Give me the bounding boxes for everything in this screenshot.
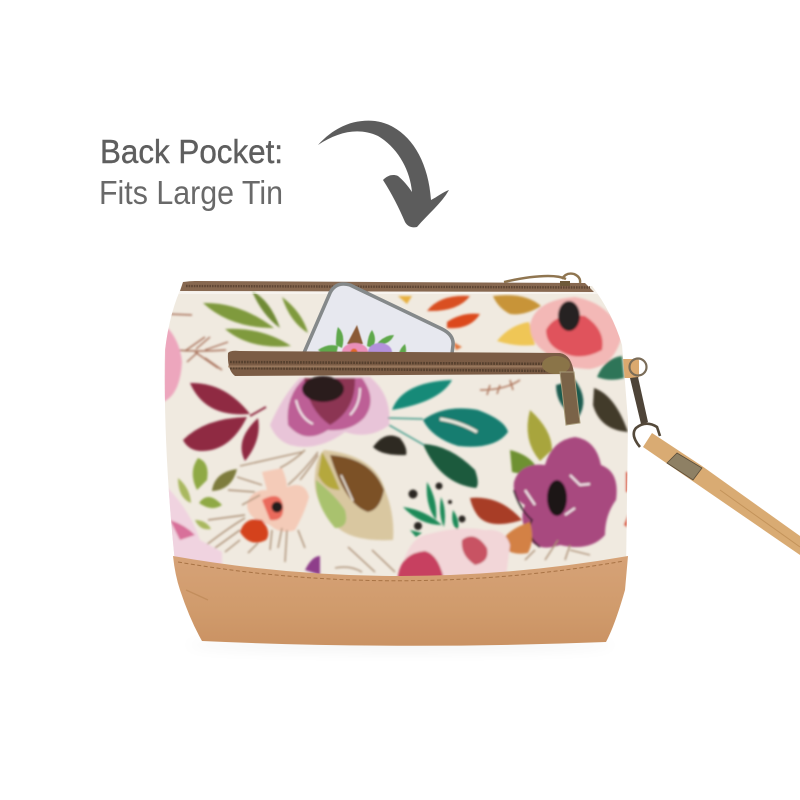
maroon leaves (183, 383, 266, 461)
fabric body (165, 284, 628, 582)
front pocket zipper (228, 351, 580, 425)
magenta flower (514, 437, 617, 548)
heading: Back Pocket: Back Pocket: (100, 133, 283, 170)
tan leather base (173, 556, 628, 646)
base stitching (178, 561, 624, 581)
tin lid (300, 284, 453, 362)
top-left olive leaves (203, 291, 308, 347)
photo: floral pouch with wristlet strap (163, 274, 800, 651)
swivel clasp (630, 377, 648, 424)
olive and green leaves right (510, 410, 552, 473)
strap tab and ring (622, 358, 646, 378)
left pink flower top (163, 325, 182, 402)
top zipper pull (504, 274, 580, 286)
metal strap band (667, 453, 702, 480)
bottom pink flower (398, 528, 510, 585)
bottom-left pale flower (168, 489, 222, 564)
red-brown and orange leaves (470, 498, 522, 524)
tin floral artwork (318, 325, 406, 362)
red poppy top right (530, 297, 622, 369)
arrow: curved arrow pointing down into the pocket (318, 121, 449, 227)
strap body (643, 433, 800, 555)
sprig branch under pocket (480, 380, 520, 395)
right side dark leaves (556, 356, 628, 432)
fine stems (200, 450, 590, 572)
upper lining highlight below the zipper (170, 291, 610, 294)
wristlet strap (622, 358, 800, 555)
bag ground shadow (185, 639, 615, 651)
text: Fits Large Tin: Fits Large Tin (99, 174, 283, 211)
salmon flower (240, 468, 309, 543)
small green leaves left (178, 458, 237, 529)
teal leaves (373, 380, 508, 488)
label: Back Pocket text (99, 133, 283, 211)
floral print (163, 291, 634, 585)
tin peeking out of the back pocket (300, 284, 453, 362)
top zipper (180, 274, 594, 292)
left branch sprig (168, 314, 228, 370)
pocket zipper slider and pull tab (542, 356, 580, 425)
large rose (270, 376, 389, 447)
green sprig with berries (403, 482, 466, 537)
large brown-green leaf (315, 450, 393, 540)
right edge colour flecks (622, 470, 628, 528)
small purple petal (305, 556, 320, 575)
gold leaves (493, 295, 541, 314)
D-ring (634, 424, 660, 447)
back-pocket orange leaves (398, 296, 480, 350)
